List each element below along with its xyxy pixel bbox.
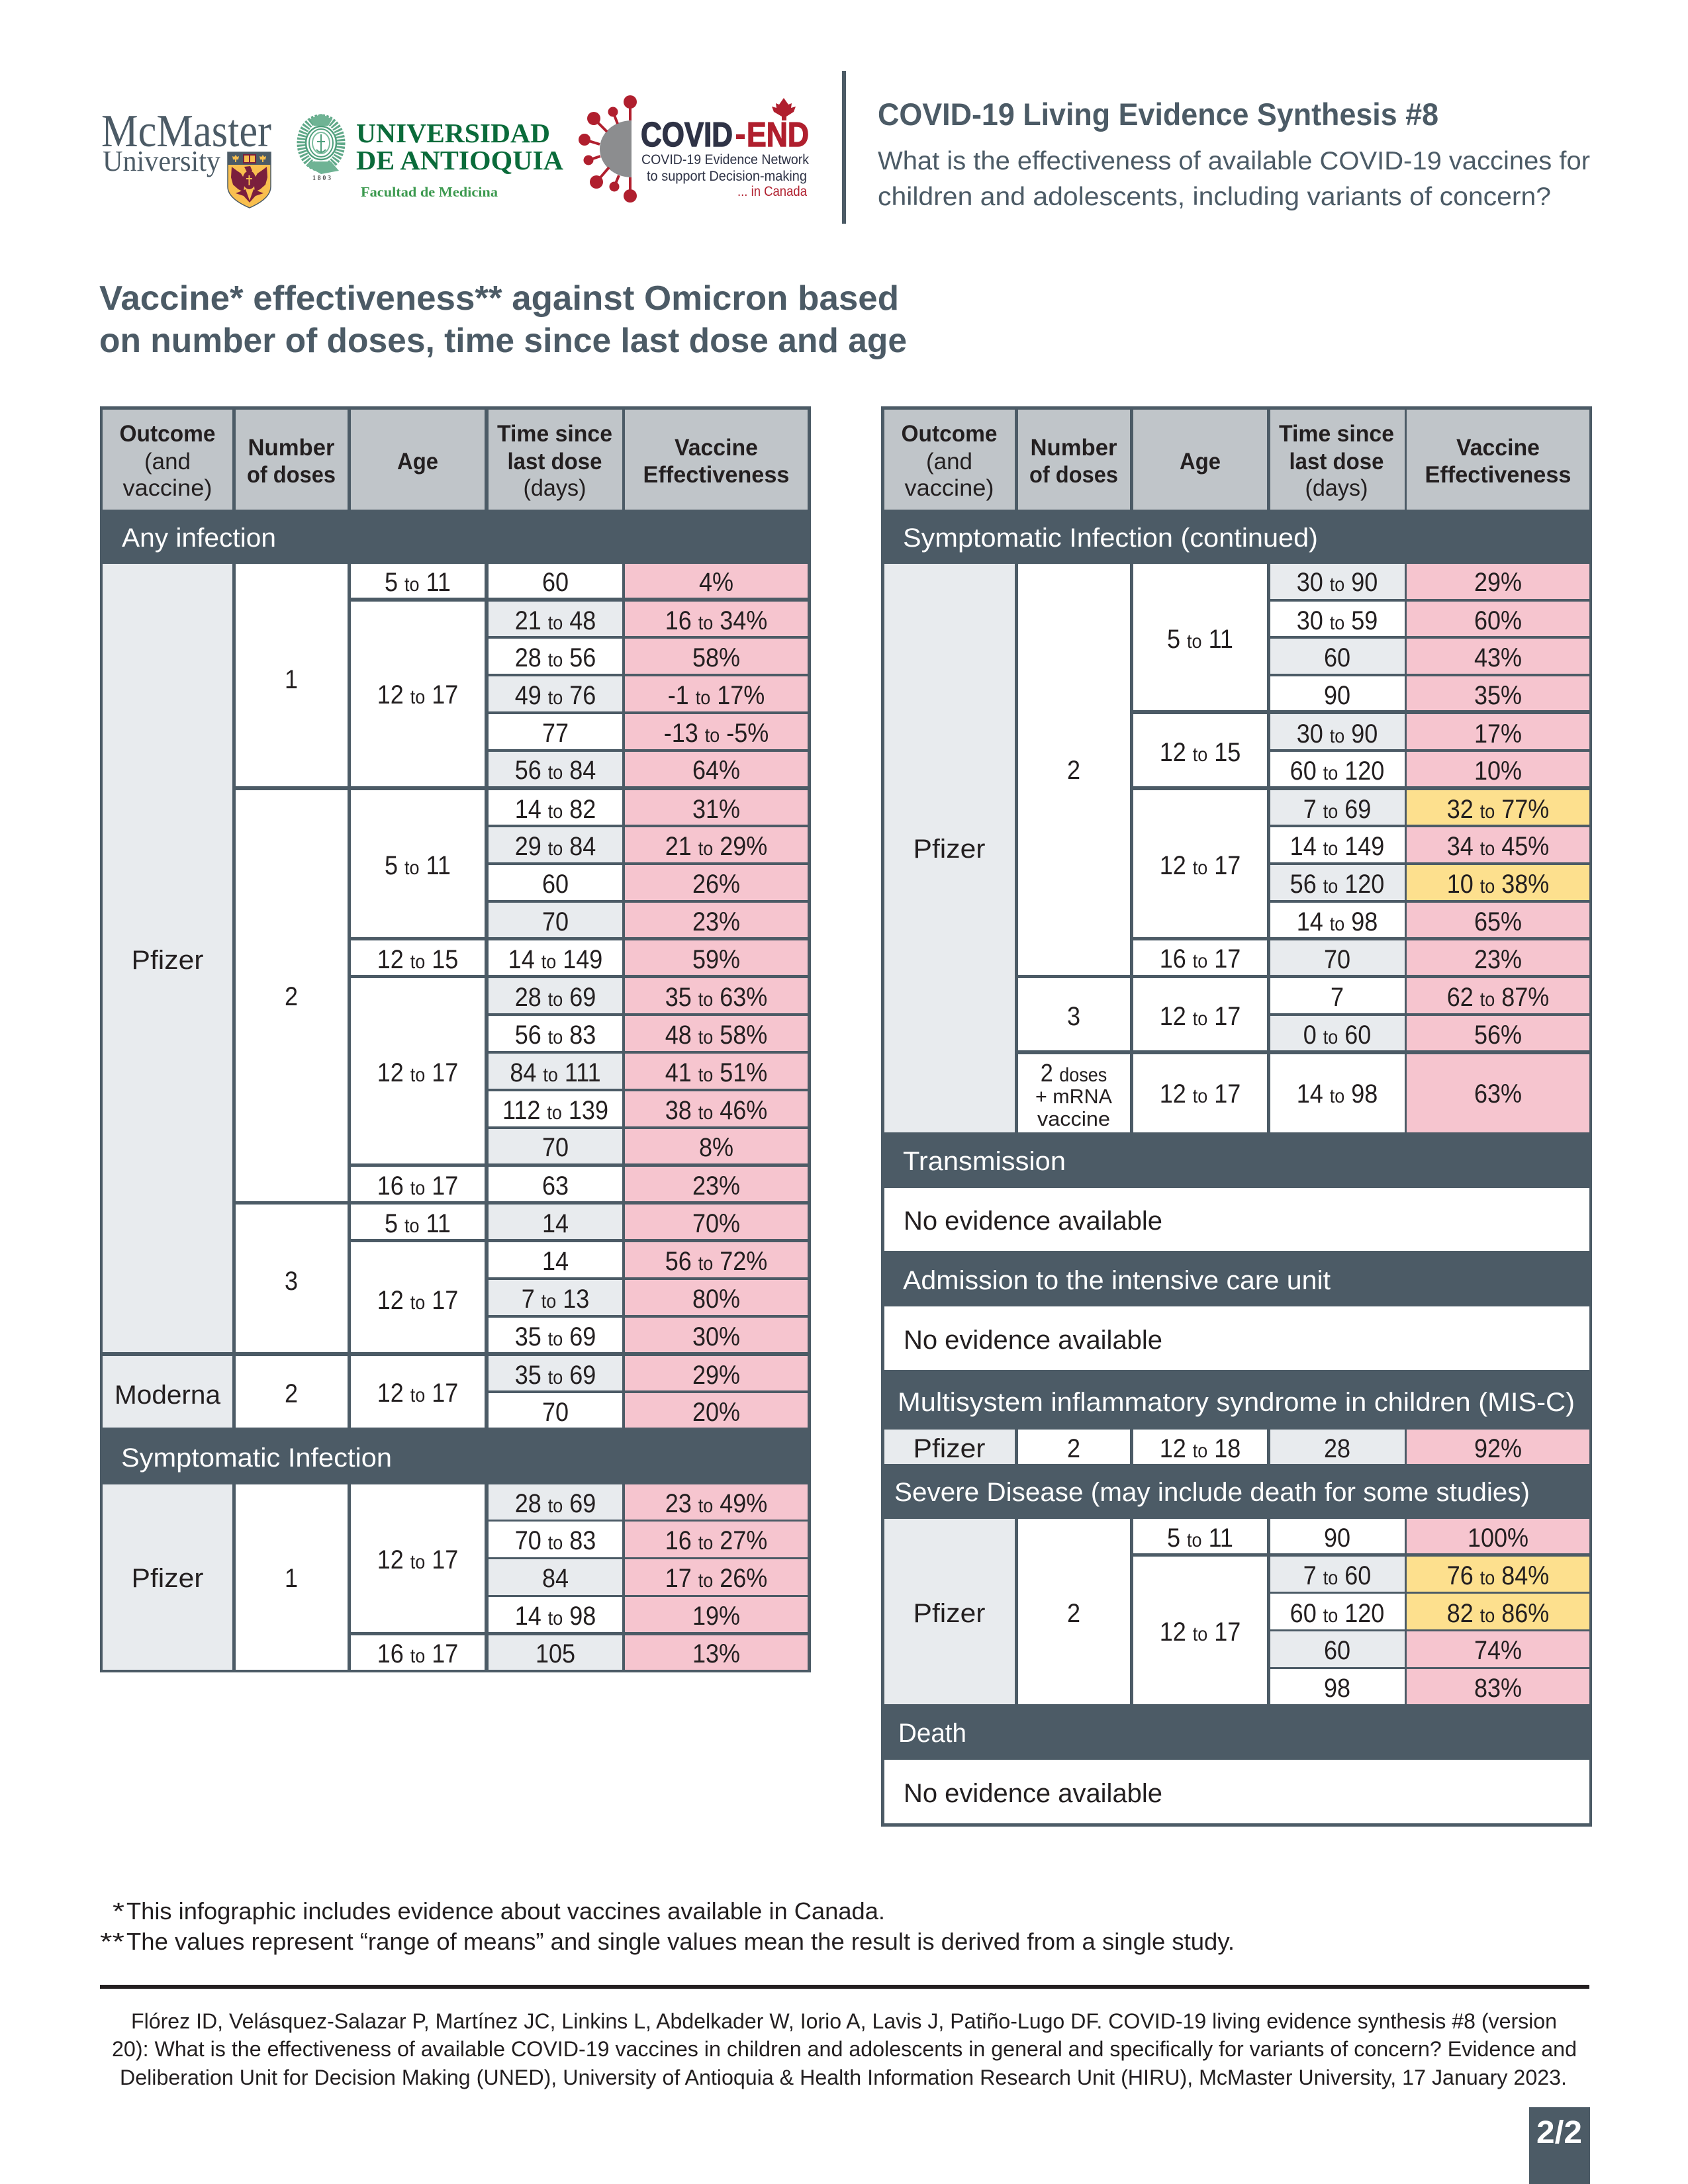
row: time and effectiveness: 41 to 51%	[665, 1058, 767, 1087]
row: time and effectiveness: 70	[542, 907, 569, 936]
row: time and effectiveness: 84	[542, 1564, 569, 1593]
row: time and effectiveness	[489, 752, 808, 786]
row: time and effectiveness: 10 to 38%	[1447, 870, 1549, 899]
table header row: Outcome	[902, 421, 997, 447]
row: MIS-C Pfizer: Pfizer	[914, 1434, 985, 1463]
logo: COVID-END: END	[747, 116, 809, 154]
age cell: 12 to 15	[377, 945, 458, 974]
row: time and effectiveness: 70	[542, 1398, 569, 1427]
row: time and effectiveness: 60	[542, 870, 569, 899]
row: time and effectiveness	[489, 676, 808, 711]
page number tab: 2/2	[1536, 2115, 1582, 2150]
footnotes	[100, 1897, 1235, 1955]
row: time and effectiveness: 82 to 86%	[1447, 1599, 1549, 1628]
row: time and effectiveness	[1270, 1054, 1589, 1132]
row: time and effectiveness: 14 to 98	[1297, 1079, 1378, 1109]
table header row: of doses	[247, 462, 336, 488]
row: time and effectiveness: 56 to 120	[1290, 870, 1384, 899]
row: time and effectiveness: 13%	[692, 1639, 740, 1668]
row: time and effectiveness: 77	[542, 719, 569, 748]
row: time and effectiveness: 60 to 120	[1290, 1599, 1384, 1628]
row: time and effectiveness: 60	[1324, 1636, 1350, 1665]
age cell: 16 to 17	[1160, 944, 1241, 974]
row: time and effectiveness	[489, 1559, 808, 1595]
row: time and effectiveness: 60%	[1474, 606, 1522, 635]
logo: McMaster University: University	[103, 145, 220, 177]
row: time and effectiveness: 7 to 69	[1303, 795, 1371, 824]
age cell	[1133, 978, 1267, 1050]
row: time and effectiveness: 70 to 83	[515, 1526, 596, 1555]
row: time and effectiveness	[1270, 1557, 1589, 1592]
row: time and effectiveness: 10%	[1474, 756, 1522, 786]
row: time and effectiveness	[1270, 1594, 1589, 1629]
row: time and effectiveness	[1270, 602, 1589, 636]
row: time and effectiveness: 7 to 60	[1303, 1561, 1371, 1590]
row: time and effectiveness	[1270, 865, 1589, 900]
row: time and effectiveness	[1270, 903, 1589, 937]
section band: Severe Disease: Severe Disease (may include death for some studies)	[894, 1478, 1530, 1507]
row: time and effectiveness: 30 to 90	[1297, 719, 1378, 749]
no evidence box: Death: No evidence available	[904, 1779, 1162, 1808]
row: time and effectiveness: 31%	[692, 795, 740, 824]
logo: COVID-END: COVID	[641, 116, 733, 154]
row: time and effectiveness: 35%	[1474, 681, 1522, 710]
row: time and effectiveness	[489, 714, 808, 749]
dose cell: 2: 2	[1067, 756, 1080, 785]
row: time and effectiveness	[489, 1356, 808, 1390]
row: time and effectiveness	[489, 1167, 808, 1201]
age cell	[351, 790, 485, 937]
row: time and effectiveness	[489, 639, 808, 674]
age cell: 12 to 17	[377, 1545, 458, 1574]
row: time and effectiveness: 30%	[692, 1322, 740, 1351]
title	[99, 279, 907, 360]
row: time and effectiveness	[1270, 940, 1589, 975]
table header row: Time since	[1279, 421, 1394, 447]
citation: Flórez ID, Velásquez-Salazar P, Martínez JC, Linkins L, Abdelkader W, Iorio A, Lavis J, Patiño-Lugo DF. COVID-19 living evidence synthesis #8 (version	[131, 2009, 1557, 2033]
row: time and effectiveness	[1270, 978, 1589, 1013]
row: time and effectiveness: 17%	[1474, 719, 1522, 749]
row: time and effectiveness: 35 to 69	[515, 1322, 596, 1351]
row: time and effectiveness: 98	[1324, 1674, 1350, 1703]
age cell: 5 to 11	[1167, 625, 1233, 654]
row: time and effectiveness: 74%	[1474, 1636, 1522, 1665]
age cell: 5 to 11	[385, 1209, 451, 1238]
section band: Any infection: Any infection	[122, 523, 276, 553]
row: time and effectiveness: 70%	[692, 1209, 740, 1238]
section band: Admission to the intensive care unit: Admission to the intensive care unit	[903, 1266, 1331, 1295]
row: time and effectiveness: 16 to 34%	[665, 606, 767, 635]
age cell: 12 to 15	[1160, 738, 1241, 767]
row: time and effectiveness	[489, 1054, 808, 1089]
table header row: (and	[926, 449, 972, 475]
row: time and effectiveness: 60 to 120	[1290, 756, 1384, 786]
dose cell: 2 (Moderna): 2	[285, 1379, 298, 1408]
table header row: of doses	[1029, 462, 1118, 488]
row: time and effectiveness: 83%	[1474, 1674, 1522, 1703]
no evidence box: Death	[884, 1760, 1589, 1823]
table header row: vaccine)	[123, 475, 212, 501]
outcome cell: Pfizer: Pfizer	[131, 946, 204, 975]
row: time and effectiveness: 56 to 84	[515, 756, 596, 785]
row: time and effectiveness: 14	[542, 1247, 569, 1276]
row: time and effectiveness: 21 to 29%	[665, 832, 767, 861]
dose cell: 2 doses + mRNA vaccine: + mRNA	[1035, 1085, 1112, 1108]
row: time and effectiveness	[489, 1597, 808, 1632]
outcome cell: Pfizer: Pfizer	[131, 1564, 204, 1593]
logo: McMaster University	[101, 106, 271, 208]
table header row: Outcome	[119, 421, 216, 447]
outcome cell: Pfizer: Pfizer	[914, 835, 985, 864]
row: time and effectiveness	[489, 1129, 808, 1163]
row: time and effectiveness: 58%	[692, 643, 740, 672]
row: time and effectiveness	[489, 978, 808, 1013]
table header row: Vaccine	[1456, 435, 1540, 461]
row: time and effectiveness: 65%	[1474, 907, 1522, 936]
row: time and effectiveness: 105	[536, 1639, 575, 1668]
row: time and effectiveness: 28 to 69	[515, 983, 596, 1012]
row: time and effectiveness: 26%	[692, 870, 740, 899]
row: time and effectiveness	[489, 790, 808, 825]
row: MIS-C Pfizer: 92%	[1474, 1434, 1522, 1463]
title: Vaccine* effectiveness** against Omicron based	[99, 279, 899, 318]
table header row: (days)	[1305, 475, 1368, 501]
row: time and effectiveness: 112 to 139	[502, 1096, 608, 1125]
age cell	[1133, 714, 1267, 786]
age cell	[351, 1167, 485, 1201]
table header row: Effectiveness	[1425, 462, 1571, 488]
row: time and effectiveness: 23%	[692, 1171, 740, 1201]
row: time and effectiveness: 43%	[1474, 643, 1522, 672]
row: time and effectiveness	[1270, 1631, 1589, 1667]
section band: Death: Death	[898, 1719, 966, 1748]
citation: 20): What is the effectiveness of available COVID-19 vaccines in children and adolescents in general and specifically for variants of concern? Evidence and	[112, 2037, 1577, 2061]
row: time and effectiveness	[489, 1280, 808, 1315]
row: time and effectiveness: 100%	[1468, 1524, 1528, 1553]
row: time and effectiveness: 63	[542, 1171, 569, 1201]
row: MIS-C Pfizer: 28	[1324, 1434, 1350, 1463]
table header row: Time since	[497, 421, 612, 447]
page number tab	[1529, 2107, 1590, 2184]
outcome cell: Moderna	[103, 1356, 232, 1428]
dose cell: 2 doses + mRNA vaccine	[1018, 1054, 1130, 1132]
logo: Universidad de Antioquia: 1803	[312, 175, 331, 182]
row: time and effectiveness: 60	[1324, 643, 1350, 672]
age cell	[351, 1356, 485, 1428]
row: time and effectiveness: 64%	[692, 756, 740, 785]
row: time and effectiveness	[1270, 1016, 1589, 1050]
table header row: Age	[397, 449, 438, 475]
age cell	[351, 1484, 485, 1632]
age cell: 12 to 17	[1160, 1002, 1241, 1031]
no evidence box: Transmission	[884, 1188, 1589, 1251]
row: MIS-C Pfizer: 2	[1067, 1434, 1080, 1463]
dose cell: 1: 1	[285, 1564, 298, 1593]
row: time and effectiveness	[489, 602, 808, 636]
row: time and effectiveness	[489, 564, 808, 598]
row: time and effectiveness: 63%	[1474, 1079, 1522, 1109]
row: time and effectiveness: 28 to 69	[515, 1489, 596, 1518]
row: time and effectiveness	[489, 1393, 808, 1428]
no evidence box: ICU admission: No evidence available	[904, 1326, 1162, 1355]
age cell: 16 to 17	[377, 1639, 458, 1668]
age cell	[1133, 940, 1267, 975]
row: time and effectiveness: 30 to 59	[1297, 606, 1378, 635]
row: time and effectiveness: 17 to 26%	[665, 1564, 767, 1593]
row: time and effectiveness	[489, 1242, 808, 1277]
table header row: last dose	[1289, 449, 1383, 475]
row: time and effectiveness: 28 to 56	[515, 643, 596, 672]
age cell: 12 to 17	[1160, 1079, 1241, 1109]
age cell	[351, 978, 485, 1163]
age cell: 12 to 17	[1160, 851, 1241, 880]
row: time and effectiveness: 14 to 149	[508, 945, 602, 974]
age cell	[351, 564, 485, 598]
age cell: 5 to 11	[385, 568, 451, 597]
row: time and effectiveness: 16 to 27%	[665, 1526, 767, 1555]
row: time and effectiveness: 14 to 98	[1297, 907, 1378, 936]
row: time and effectiveness: 14 to 82	[515, 795, 596, 824]
row: time and effectiveness: 29%	[1474, 568, 1522, 597]
row: time and effectiveness	[489, 1318, 808, 1352]
dose cell: 3	[236, 1205, 348, 1352]
age cell	[1133, 790, 1267, 937]
age cell	[1133, 564, 1267, 710]
header text: synthesis title and question	[878, 97, 1590, 211]
row: time and effectiveness	[1270, 714, 1589, 749]
header text: synthesis title and question: COVID-19 Living Evidence Synthesis #8	[878, 97, 1438, 132]
logo: Universidad de Antioquia: UNIVERSIDAD	[356, 118, 550, 148]
outcome cell: Moderna: Moderna	[115, 1381, 221, 1410]
row: time and effectiveness: 19%	[692, 1602, 740, 1631]
age cell	[1133, 1054, 1267, 1132]
age cell	[1133, 1519, 1267, 1553]
section band: Transmission: Transmission	[903, 1147, 1066, 1176]
outcome cell: Pfizer	[103, 564, 232, 1352]
row: time and effectiveness: 90	[1324, 681, 1350, 710]
row: time and effectiveness	[489, 1016, 808, 1051]
row: time and effectiveness: 34 to 45%	[1447, 832, 1549, 861]
table header row: last dose	[507, 449, 602, 475]
row: time and effectiveness: 4%	[699, 568, 733, 597]
row: time and effectiveness: 59%	[692, 945, 740, 974]
age cell	[351, 1242, 485, 1352]
row: time and effectiveness: 23%	[1474, 945, 1522, 974]
row: time and effectiveness: 35 to 69	[515, 1361, 596, 1390]
row: time and effectiveness	[489, 1522, 808, 1557]
row: time and effectiveness: 62 to 87%	[1447, 983, 1549, 1012]
table header row	[884, 410, 1589, 510]
dose cell: 1	[236, 1484, 348, 1670]
dose cell: 2: 2	[1067, 1599, 1080, 1628]
title: on number of doses, time since last dose and age	[99, 322, 907, 360]
row: time and effectiveness: 7 to 13	[522, 1285, 589, 1314]
row: time and effectiveness: 76 to 84%	[1447, 1561, 1549, 1590]
dose cell: 2: 2	[285, 982, 298, 1011]
row: time and effectiveness: 60	[542, 568, 569, 597]
row: time and effectiveness: 90	[1324, 1524, 1350, 1553]
logo: COVID-END	[579, 95, 809, 203]
footnotes: **	[100, 1928, 124, 1955]
row: time and effectiveness: 23 to 49%	[665, 1489, 767, 1518]
row: time and effectiveness: 70	[1324, 945, 1350, 974]
row: time and effectiveness	[1270, 639, 1589, 674]
section band: Symptomatic Infection: Symptomatic Infection	[121, 1443, 392, 1473]
table header row: vaccine)	[904, 475, 994, 501]
dose cell: 2	[1018, 1519, 1130, 1704]
row: time and effectiveness: 20%	[692, 1398, 740, 1427]
header text: synthesis title and question: What is the effectiveness of available COVID-19 vaccines for	[878, 147, 1590, 175]
row: time and effectiveness: 70	[542, 1133, 569, 1162]
panel: right table	[881, 406, 1592, 1827]
table header row: Age	[1180, 449, 1221, 475]
dose cell: 2	[236, 790, 348, 1201]
age cell	[351, 940, 485, 975]
row: time and effectiveness: 7	[1331, 983, 1344, 1012]
logo: Universidad de Antioquia: DE ANTIOQUIA	[356, 145, 563, 175]
table header row: (days)	[523, 475, 586, 501]
age cell: 5 to 11	[385, 851, 451, 880]
age cell	[1133, 1557, 1267, 1704]
row: time and effectiveness: 21 to 48	[515, 606, 596, 635]
dose cell: 2	[1018, 564, 1130, 975]
age cell	[351, 1205, 485, 1239]
row: time and effectiveness	[1270, 676, 1589, 710]
logo: COVID-END: ... in Canada	[737, 184, 807, 199]
table header row: Number	[248, 435, 335, 461]
row: time and effectiveness: 30 to 90	[1297, 568, 1378, 597]
no evidence box: Transmission: No evidence available	[904, 1206, 1162, 1236]
row: time and effectiveness	[489, 1484, 808, 1520]
row: time and effectiveness	[1270, 1669, 1589, 1704]
logo: McMaster University: McMaster	[101, 106, 271, 157]
row: MIS-C Pfizer	[884, 1430, 1589, 1464]
outcome cell: Pfizer	[884, 564, 1015, 1132]
section band: MIS-C: Multisystem inflammatory syndrome in children (MIS-C)	[898, 1388, 1575, 1417]
age cell: 5 to 11	[1167, 1524, 1233, 1553]
row: time and effectiveness	[1270, 790, 1589, 825]
citation: Deliberation Unit for Decision Making (UNED), University of Antioquia & Health Information Research Unit (HIRU), McMaster University, 17 January 2023.	[120, 2066, 1567, 2089]
age cell: 12 to 17	[377, 1058, 458, 1087]
logo: COVID-END: COVID-19 Evidence Network	[641, 152, 809, 167]
row: time and effectiveness: -1 to 17%	[668, 681, 765, 710]
age cell: 12 to 17	[1160, 1617, 1241, 1647]
citation	[112, 2009, 1577, 2089]
outcome cell: Pfizer: Pfizer	[914, 1599, 985, 1628]
age cell: 12 to 17	[377, 1379, 458, 1408]
row: time and effectiveness: 14 to 98	[515, 1602, 596, 1631]
row: time and effectiveness	[1270, 827, 1589, 862]
row: time and effectiveness: 48 to 58%	[665, 1021, 767, 1050]
row: time and effectiveness: 56 to 72%	[665, 1247, 767, 1276]
table header row: Number	[1030, 435, 1117, 461]
table header row: (and	[144, 449, 191, 475]
row: time and effectiveness: 38 to 46%	[665, 1096, 767, 1125]
footnotes: This infographic includes evidence about vaccines available in Canada.	[126, 1897, 885, 1925]
row: time and effectiveness: 14	[542, 1209, 569, 1238]
row: time and effectiveness	[489, 827, 808, 862]
row: time and effectiveness: 0 to 60	[1303, 1021, 1371, 1050]
row: time and effectiveness: 80%	[692, 1285, 740, 1314]
logo: Universidad de Antioquia	[301, 114, 563, 200]
row: time and effectiveness: 49 to 76	[515, 681, 596, 710]
row: MIS-C Pfizer: 12 to 18	[1160, 1434, 1241, 1463]
row: time and effectiveness	[489, 1205, 808, 1239]
dose cell: 2 (Moderna)	[236, 1356, 348, 1428]
row: time and effectiveness	[489, 903, 808, 937]
row: time and effectiveness	[1270, 564, 1589, 599]
row: time and effectiveness: 32 to 77%	[1447, 795, 1549, 824]
row: time and effectiveness: 35 to 63%	[665, 983, 767, 1012]
no evidence box: ICU admission	[884, 1306, 1589, 1370]
header text: synthesis title and question: children and adolescents, including variants of concern?	[878, 183, 1551, 211]
dose cell: 3	[1018, 978, 1130, 1050]
footnotes: The values represent “range of means” and single values mean the result is derived from a single study.	[126, 1928, 1235, 1955]
row: time and effectiveness: -13 to -5%	[664, 719, 769, 748]
age cell: 16 to 17	[377, 1171, 458, 1201]
dose cell: 1: 1	[285, 665, 298, 694]
table header row	[103, 410, 808, 510]
footnotes: *	[113, 1897, 124, 1925]
dose cell: 1	[236, 564, 348, 786]
row: time and effectiveness	[489, 865, 808, 900]
dose cell: 2 doses + mRNA vaccine: vaccine	[1037, 1107, 1110, 1130]
row: time and effectiveness: 29%	[692, 1361, 740, 1390]
row: time and effectiveness	[489, 940, 808, 975]
panel: left table	[100, 406, 811, 1672]
logo: COVID-END: to support Decision-making	[647, 169, 807, 184]
row: time and effectiveness	[1270, 1519, 1589, 1553]
outcome cell: Pfizer	[103, 1484, 232, 1670]
row: time and effectiveness: 56%	[1474, 1021, 1522, 1050]
age cell: 12 to 17	[377, 680, 458, 709]
dose cell: 3: 3	[1067, 1002, 1080, 1031]
row: time and effectiveness	[489, 1091, 808, 1126]
row: time and effectiveness: 8%	[699, 1133, 733, 1162]
table header row: Effectiveness	[643, 462, 789, 488]
row: time and effectiveness: 84 to 111	[510, 1058, 601, 1087]
table header row: Vaccine	[675, 435, 758, 461]
age cell: 12 to 17	[377, 1286, 458, 1315]
row: time and effectiveness: 23%	[692, 907, 740, 936]
row: time and effectiveness	[1270, 752, 1589, 786]
row: time and effectiveness: 29 to 84	[515, 832, 596, 861]
row: time and effectiveness: 14 to 149	[1290, 832, 1384, 861]
row: time and effectiveness: 56 to 83	[515, 1021, 596, 1050]
row: time and effectiveness	[489, 1635, 808, 1670]
age cell	[351, 602, 485, 786]
logo: Universidad de Antioquia: Facultad de Medicina	[361, 184, 498, 200]
outcome cell: Pfizer	[884, 1519, 1015, 1704]
section band: Symptomatic Infection (continued): Symptomatic Infection (continued)	[903, 523, 1318, 553]
age cell	[351, 1635, 485, 1670]
dose cell: 3: 3	[285, 1267, 298, 1296]
dose cell: 2 doses + mRNA vaccine: 2 doses	[1041, 1058, 1107, 1087]
